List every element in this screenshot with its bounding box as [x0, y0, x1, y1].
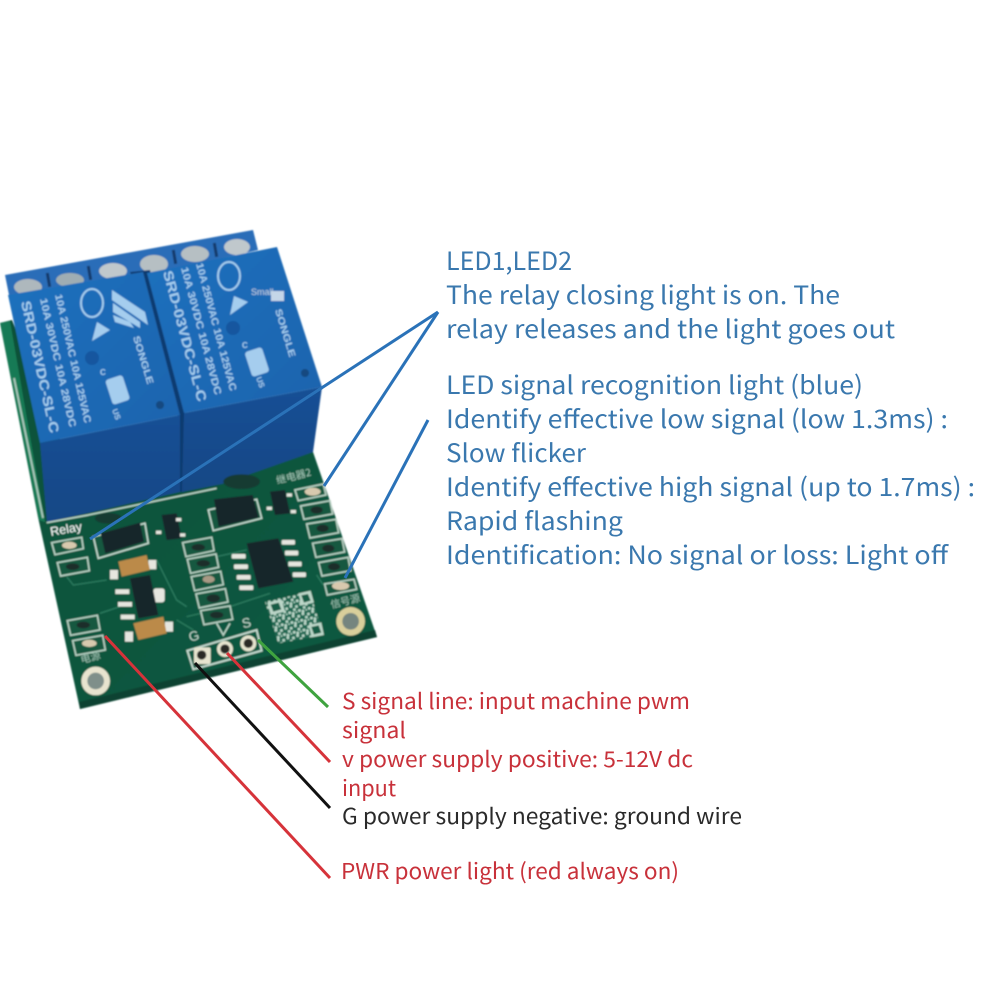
relay 2: 10A 250VAC 10A 125VAC — [193, 262, 238, 392]
silkscreen CJK labels: 电源 — [79, 647, 102, 666]
text block: LED1, LED2: relay releases and the light goes out — [446, 310, 896, 346]
product photo: relay board — [0, 230, 377, 709]
regulator and tantalum capacitors — [110, 555, 173, 642]
relay 2: SRD-03VDC-SL-C — [160, 269, 210, 403]
resistor and LED pads — [52, 484, 357, 655]
relay 1 — [8, 272, 180, 522]
relay terminals — [5, 230, 258, 300]
QR code — [265, 591, 324, 643]
blue line to LED1 — [90, 312, 438, 539]
silkscreen CJK labels: 信号源 — [329, 589, 361, 611]
text block: v power supply: input — [342, 771, 396, 803]
text block: LED signal recognition: Slow flicker — [446, 434, 586, 470]
blue line to signal LED — [345, 420, 428, 578]
header with G V S pins — [187, 614, 262, 669]
green line to S pin — [258, 640, 328, 707]
red line to PWR LED — [105, 636, 330, 878]
text block: G power supply: G power supply negative: ground wire — [342, 799, 742, 831]
relay label on board: Relay — [49, 519, 84, 539]
relay 2: US — [254, 376, 267, 390]
relay 2: SONGLE — [272, 308, 297, 359]
blue line to LED2 — [324, 312, 438, 486]
leader lines — [90, 312, 438, 878]
relay 2: C — [242, 341, 248, 350]
relay 2 — [147, 247, 322, 492]
relay 2: 10A 30VDC 10A 28VDC — [178, 266, 223, 396]
relay 1: 10A 30VDC 10A 28VDC — [37, 297, 77, 428]
silkscreen CJK labels: 继电器2 — [274, 464, 313, 487]
text block: LED signal recognition: Identify effective low signal (low 1.3ms) : — [446, 400, 948, 436]
relay 2: Small — [251, 287, 274, 297]
text block: LED1, LED2 — [446, 242, 896, 346]
text block: LED signal recognition: Identify effective high signal (up to 1.7ms) : — [446, 468, 975, 504]
red line to V pin — [227, 653, 330, 762]
main IC — [232, 538, 306, 590]
relay 1: C — [100, 368, 106, 377]
header with G V S pins: G — [187, 627, 201, 645]
transistors — [156, 490, 296, 540]
logo marks — [81, 289, 148, 405]
text block: LED signal recognition — [446, 366, 975, 572]
text block: LED1, LED2: LED1,LED2 — [446, 242, 572, 278]
black line to G pin — [195, 663, 330, 808]
text block: S signal line: signal — [342, 713, 406, 745]
text block: LED signal recognition: Rapid flashing — [446, 502, 623, 538]
text block: PWR power light: PWR power light (red always on) — [341, 854, 679, 886]
relay 1: 10A 250VAC 10A 125VAC — [52, 293, 92, 424]
diodes — [93, 495, 262, 558]
relay 1: US — [110, 408, 123, 422]
silkscreen under relay and shadows — [47, 474, 323, 630]
board components drawn in crop coordinates — [47, 464, 365, 695]
header with G V S pins: S — [240, 614, 253, 631]
text block: v power supply: v power supply positive: 5-12V dc — [342, 742, 693, 774]
text block: LED signal recognition: LED signal recognition light (blue) — [446, 366, 863, 402]
text block: LED signal recognition: Identification: No signal or loss: Light off — [446, 536, 949, 572]
PCB — [0, 320, 377, 709]
relay gap — [130, 270, 186, 492]
text block: S signal line: S signal line: input machine pwm — [342, 684, 690, 716]
relay 1: SRD-03VDC-SL-C — [18, 299, 62, 435]
relay 1: SONGLE — [130, 335, 155, 386]
text block: LED1, LED2: The relay closing light is on. The — [446, 276, 840, 312]
silkscreen CJK labels — [79, 464, 361, 666]
text block: S signal line — [342, 684, 690, 745]
mounting holes — [81, 607, 365, 695]
text block: v power supply — [342, 742, 693, 803]
